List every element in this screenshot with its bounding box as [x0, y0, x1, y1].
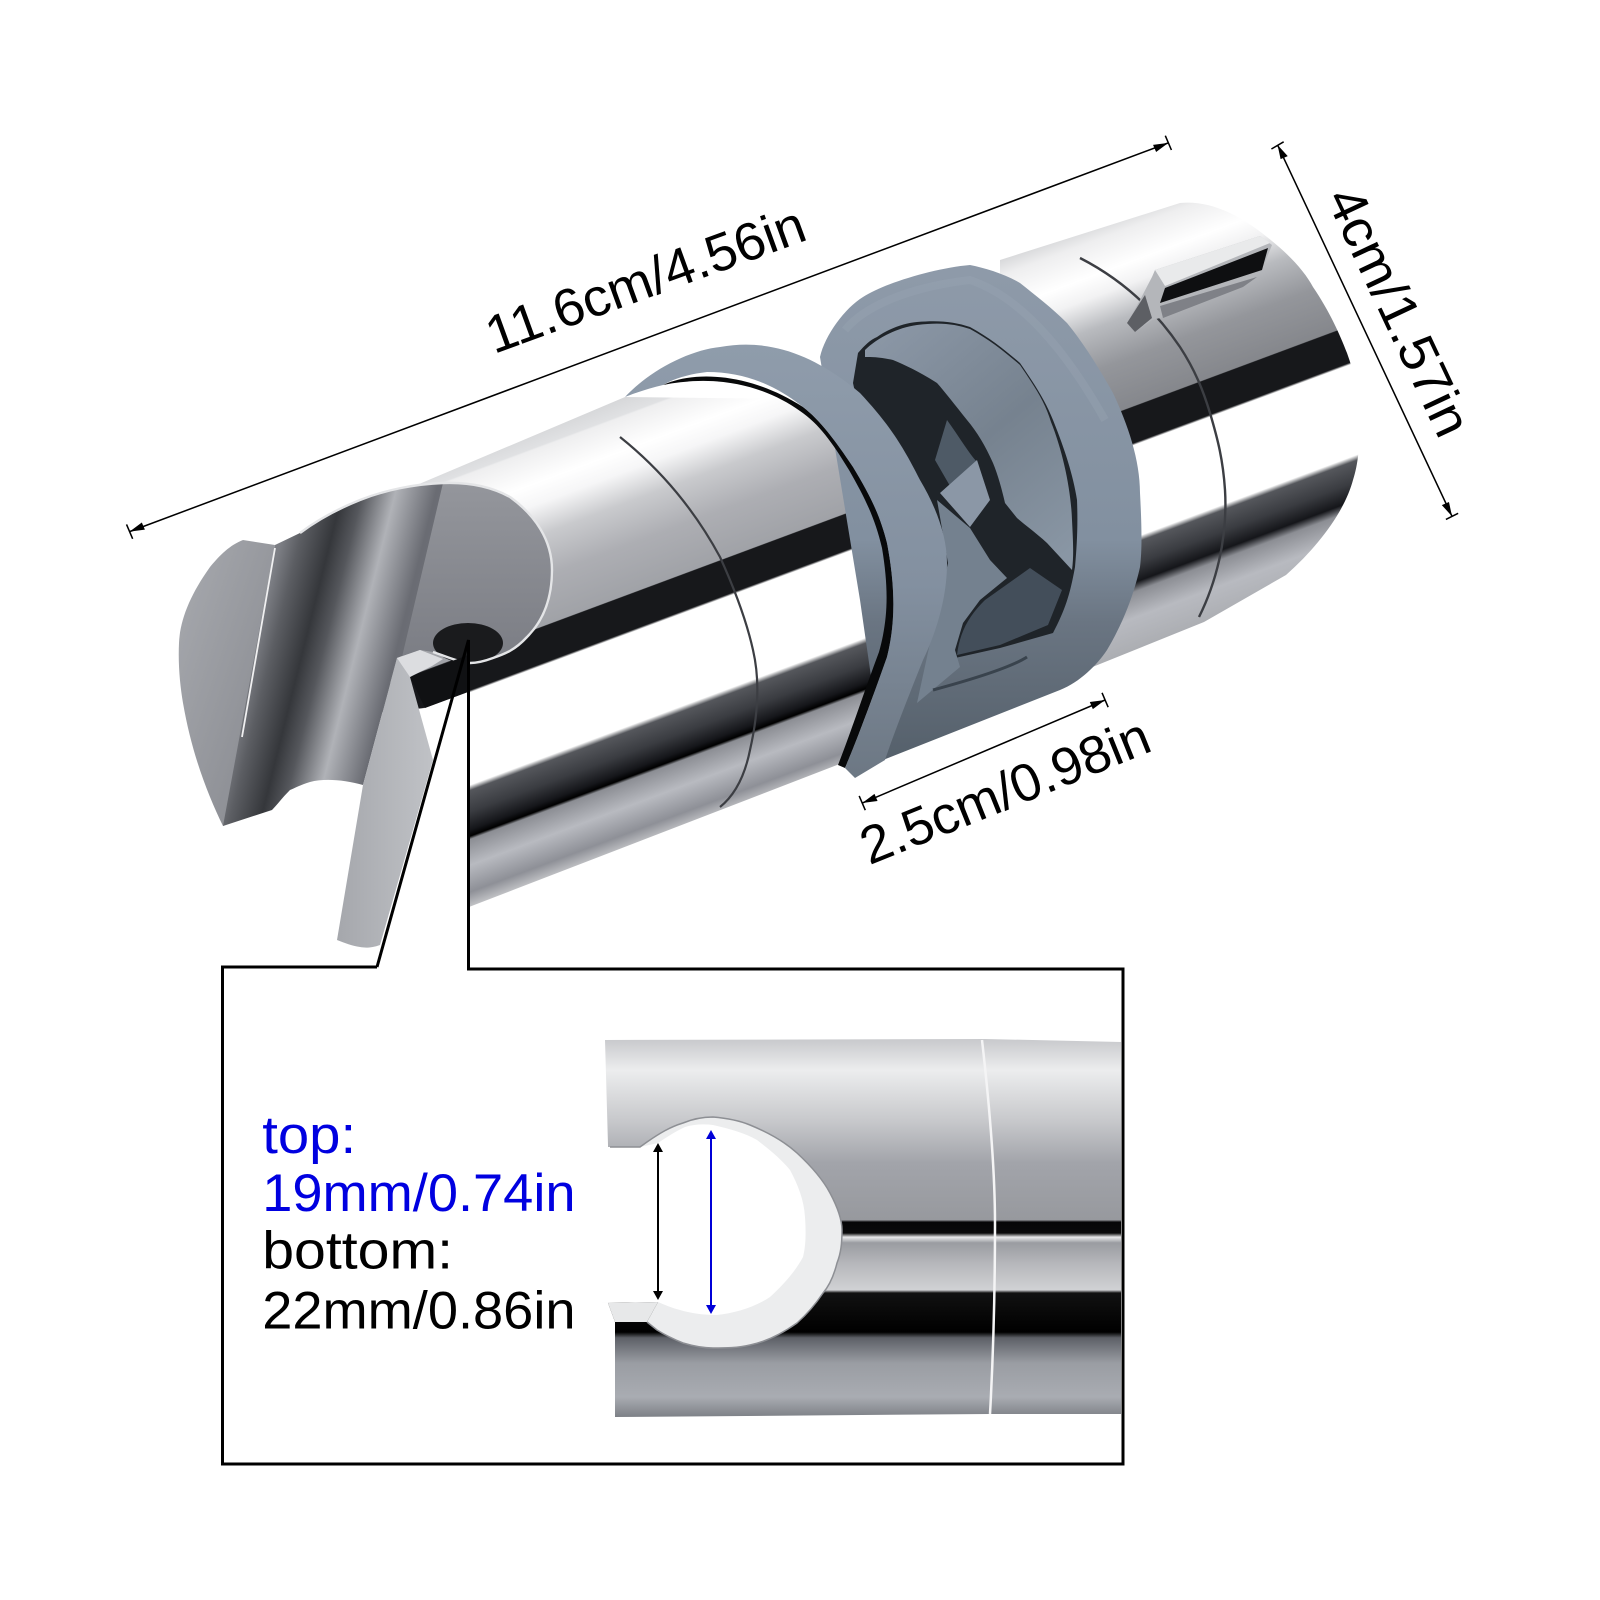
lower bowl	[957, 568, 1062, 655]
dimension: diameter 4cm/1.57in: 4cm/1.57in	[1315, 178, 1482, 446]
rod notch shadow	[410, 655, 468, 708]
large grey ring	[820, 265, 1142, 760]
inner void	[853, 321, 1077, 658]
dimension: diameter 4cm/1.57in	[1271, 142, 1482, 519]
ring highlight	[845, 280, 1105, 420]
screw hole	[433, 623, 503, 663]
inner crescent	[865, 324, 1073, 570]
lever	[1127, 236, 1272, 332]
cross bar	[940, 460, 990, 527]
cap edge highlight	[242, 548, 275, 737]
lip gap	[933, 657, 1027, 690]
cradle channel	[223, 483, 443, 826]
inset bevel	[600, 1117, 842, 1348]
opening sizes text: bottom:	[262, 1221, 453, 1280]
channel foot	[337, 650, 440, 948]
dimension: length 11.6cm/4.56in	[127, 136, 1171, 539]
inset rim	[610, 1117, 842, 1348]
rod notch cut-out	[377, 692, 468, 970]
foot lip	[397, 650, 443, 677]
opening sizes text	[262, 1106, 576, 1341]
inset seam	[982, 1040, 995, 1414]
left seam	[620, 437, 757, 807]
left end cap	[179, 540, 275, 826]
top opening arrow	[706, 1130, 716, 1314]
inset bracket front view	[600, 1039, 1121, 1417]
disc rim highlight	[300, 483, 552, 663]
opening sizes text: 22mm/0.86in	[262, 1282, 576, 1341]
callout box	[222, 640, 1123, 1464]
bottom opening arrow	[653, 1143, 663, 1300]
main cylinder section	[275, 397, 895, 907]
inset lug	[608, 1302, 658, 1322]
shadow behind thin ring	[663, 376, 893, 768]
dimension: length 11.6cm/4.56in: 11.6cm/4.56in	[478, 195, 813, 365]
right cylinder section	[1000, 203, 1360, 668]
thin grey ring	[625, 345, 947, 778]
right seam	[1080, 258, 1225, 617]
dimension: width 2.5cm/0.98in: 2.5cm/0.98in	[852, 707, 1159, 876]
opening sizes text: 19mm/0.74in	[262, 1164, 576, 1223]
round end disc	[402, 483, 552, 663]
back panel	[935, 420, 977, 486]
shower slider bracket	[179, 203, 1360, 970]
lower brace	[917, 500, 1007, 703]
opening sizes text: top:	[262, 1106, 356, 1165]
inset opening	[600, 1124, 806, 1315]
